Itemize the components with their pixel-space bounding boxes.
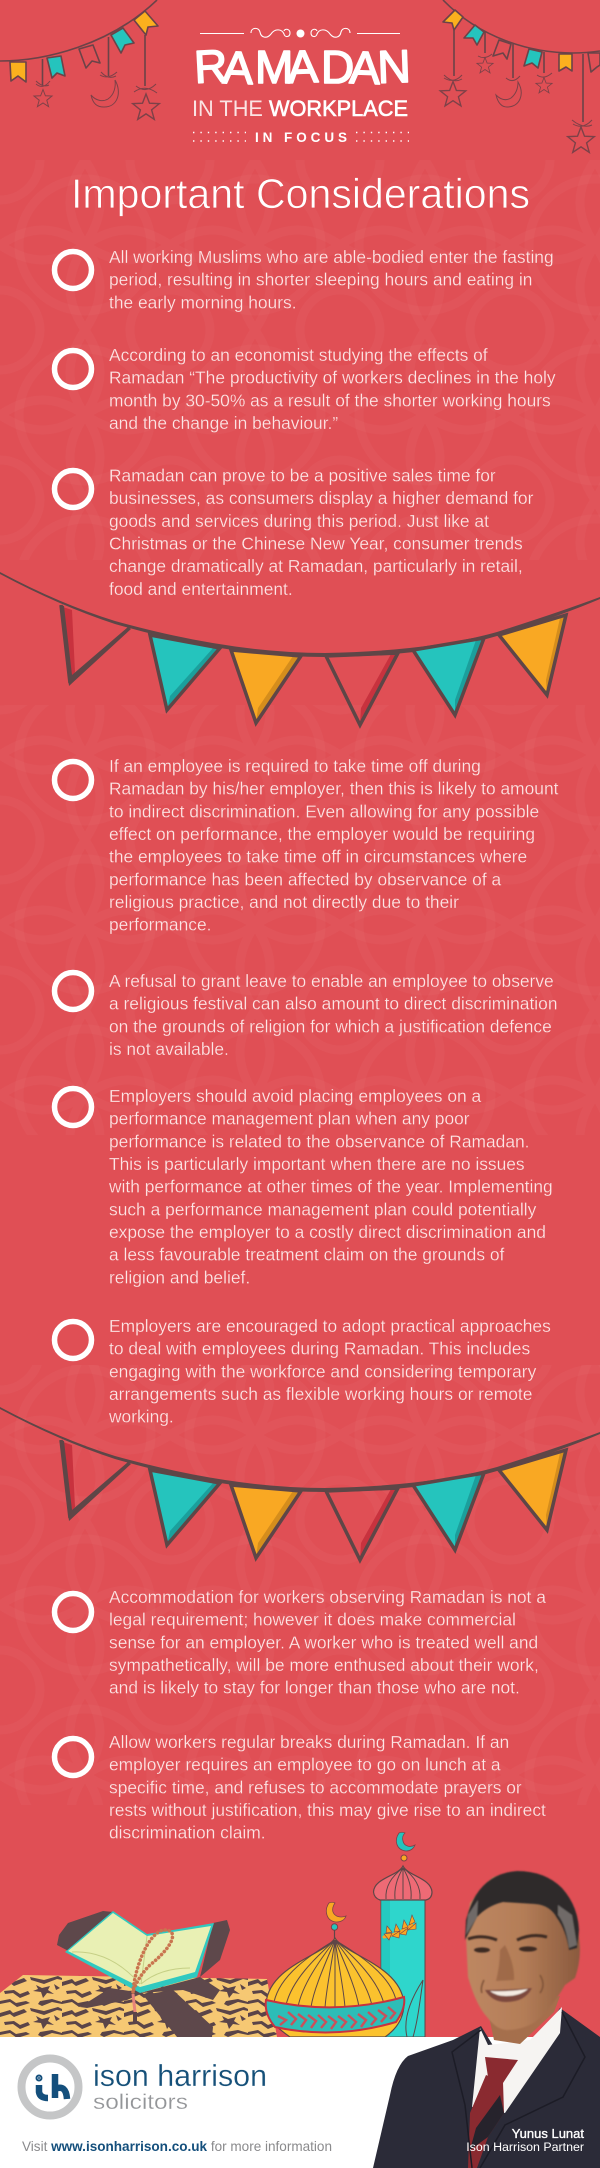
text: such a performance management plan could potentially	[109, 1199, 537, 1219]
title block	[192, 28, 412, 145]
text: Christmas or the Chinese New Year, consumer trends	[109, 534, 523, 554]
text: the employees to take time off in circumstances where	[109, 847, 527, 867]
text: If an employee is required to take time off during	[109, 756, 481, 776]
crescent	[326, 1902, 346, 1922]
text: expose the employer to a costly direct discrimination and	[109, 1222, 546, 1242]
portrait caption	[466, 2126, 584, 2154]
heading: Ramadan: RAMADAN	[193, 39, 412, 94]
text: religion and belief.	[109, 1267, 250, 1287]
bunting divider 1	[0, 572, 600, 725]
text: performance management plan when any poor	[109, 1109, 470, 1129]
text	[109, 756, 559, 935]
logo monogram	[38, 2074, 67, 2099]
text: and is likely to stay for longer than those who are not.	[109, 1678, 520, 1698]
logo ring	[22, 2058, 78, 2116]
text: performance is related to the observance of Ramadan.	[109, 1131, 530, 1151]
bullet ring	[54, 762, 92, 798]
text: the early morning hours.	[109, 292, 297, 312]
text: a less favourable treatment claim on the grounds of	[109, 1245, 505, 1265]
portrait: Yunus Lunat	[373, 1871, 600, 2168]
lapels	[452, 2012, 585, 2168]
consideration 4	[54, 756, 559, 935]
text: engaging with the workforce and considering temporary	[109, 1361, 537, 1381]
neck	[488, 1996, 560, 2044]
bunting divider 2	[0, 1407, 600, 1560]
bullet ring	[54, 972, 92, 1010]
illustration: prayer carpet	[0, 1975, 277, 2037]
text: This is particularly important when there are no issues	[109, 1154, 525, 1174]
heading: in focus: IN FOCUS	[255, 130, 347, 145]
text: on the grounds of religion for which a justification defence	[109, 1016, 552, 1036]
logo subtitle: solicitors	[93, 2090, 188, 2114]
text: Employers should avoid placing employees on a	[109, 1086, 482, 1106]
text	[109, 247, 554, 312]
text	[109, 345, 556, 433]
consideration 7	[54, 1316, 551, 1427]
text	[108, 1316, 551, 1427]
text: All working Muslims who are able-bodied enter the fasting	[109, 247, 554, 267]
tie	[468, 2057, 518, 2168]
bullet ring	[54, 1088, 92, 1126]
consideration 3	[54, 466, 534, 599]
text: effect on performance, the employer would be requiring	[109, 824, 535, 844]
bullet ring	[54, 1594, 92, 1630]
consideration 8	[54, 1587, 546, 1698]
portrait caption: Yunus Lunat	[512, 2126, 584, 2141]
website call to action: Visit www.isonharrison.co.uk for more information	[22, 2138, 332, 2154]
text: sympathetically, will be more enthused about their work,	[109, 1655, 539, 1675]
consideration 1	[54, 247, 554, 312]
logo: Ison Harrison Solicitors	[22, 2058, 267, 2116]
text: month by 30-50% as a result of the shorter working hours	[109, 390, 551, 410]
text: to deal with employees during Ramadan. This includes	[109, 1339, 530, 1359]
text: Ramadan by his/her employer, then this is likely to amount	[109, 779, 559, 799]
text: and the change in behaviour.”	[109, 413, 338, 433]
text	[108, 1086, 553, 1287]
text	[109, 466, 534, 599]
text: period, resulting in shorter sleeping hours and eating in	[109, 270, 532, 290]
dotted ornaments	[193, 132, 409, 141]
hair	[465, 1871, 579, 1950]
main heading: Important Considerations: Important Considerations	[71, 170, 530, 217]
shirt	[472, 2007, 562, 2113]
text: a religious festival can also amount to direct discrimination	[109, 994, 558, 1014]
text	[109, 971, 558, 1059]
text: with performance at other times of the year. Implementing	[108, 1177, 553, 1197]
footer panel	[0, 2037, 600, 2168]
text: Ramadan “The productivity of workers declines in the holy	[109, 368, 556, 388]
text: change dramatically at Ramadan, particularly in retail,	[109, 556, 523, 576]
text: goods and services during this period. Just like at	[109, 511, 489, 531]
illustration: dome	[266, 1902, 404, 2037]
text	[109, 1587, 546, 1698]
logo wordmark: ison harrison	[93, 2059, 267, 2093]
bullet ring	[54, 1322, 92, 1358]
right hanging bunting with stars and crescent	[440, 0, 600, 152]
consideration 6	[54, 1086, 553, 1287]
background arabesque pattern	[0, 160, 600, 1805]
consideration 5	[54, 971, 558, 1059]
text: A refusal to grant leave to enable an employee to observe	[109, 971, 554, 991]
text: sense for an employer. A worker who is treated well and	[109, 1632, 538, 1652]
text: specific time, and refuses to accommodate prayers or	[109, 1777, 522, 1797]
bullet ring	[54, 252, 92, 288]
bullet ring	[54, 1738, 92, 1776]
text: food and entertainment.	[109, 579, 293, 599]
text: According to an economist studying the effects of	[109, 345, 488, 365]
text: is not available.	[109, 1039, 229, 1059]
text	[109, 1732, 546, 1843]
consideration 2	[54, 345, 556, 433]
text: to indirect discrimination. Even allowing for any possible	[109, 801, 539, 821]
head	[466, 1873, 580, 2030]
illustration: open book on stand with prayer beads	[57, 1911, 230, 2037]
left hanging bunting with stars and crescent	[0, 0, 159, 119]
text: Ramadan can prove to be a positive sales time for	[109, 466, 496, 486]
ornamental divider	[200, 28, 400, 38]
crescent	[396, 1832, 415, 1851]
text: rests without justification, this may give rise to an indirect	[109, 1800, 546, 1820]
text: employer requires an employee to go on lunch at a	[109, 1755, 501, 1775]
face features	[468, 1936, 547, 2002]
heading: in the workplace: IN THE WORKPLACE	[192, 96, 408, 121]
bullet ring	[54, 470, 92, 508]
text: performance.	[109, 915, 211, 935]
text: Accommodation for workers observing Ramadan is not a	[109, 1587, 546, 1607]
text: arrangements such as flexible working hours or remote	[109, 1384, 532, 1404]
text: legal requirement; however it does make commercial	[109, 1610, 516, 1630]
text: Employers are encouraged to adopt practical approaches	[109, 1316, 551, 1336]
text: businesses, as consumers display a higher demand for	[109, 488, 534, 508]
text: working.	[108, 1407, 174, 1427]
suit	[373, 2008, 600, 2168]
text: Allow workers regular breaks during Ramadan. If an	[109, 1732, 509, 1752]
consideration 9	[54, 1732, 546, 1843]
bullet ring	[54, 350, 92, 388]
text: performance has been affected by observance of a	[109, 869, 502, 889]
illustration: minaret	[374, 1832, 432, 2037]
portrait caption: Ison Harrison Partner	[466, 2140, 584, 2154]
text: religious practice, and not directly due to their	[109, 892, 459, 912]
text: discrimination claim.	[109, 1823, 266, 1843]
